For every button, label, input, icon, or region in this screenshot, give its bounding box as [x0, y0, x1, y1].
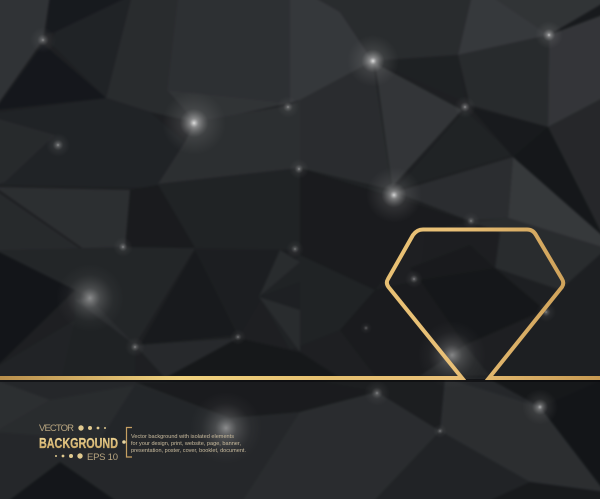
- dots: bottom row: [55, 453, 83, 459]
- label: eps 10: EPS 10: [87, 452, 118, 463]
- dots: top row: [78, 425, 106, 431]
- gold diamond line: [0, 230, 600, 380]
- description text: [131, 434, 246, 454]
- label: vector: VECTOR: [39, 423, 74, 434]
- light glows: [30, 21, 563, 464]
- description text: Vector background with isolated elements: [131, 434, 234, 440]
- description text: presentation, poster, cover, booklet, document.: [131, 448, 246, 454]
- bracket: [122, 428, 132, 457]
- description text: for your design, print, website, page, banner,: [131, 441, 241, 447]
- heading: background: BACKGROUND: [39, 436, 118, 452]
- title block: [39, 423, 118, 463]
